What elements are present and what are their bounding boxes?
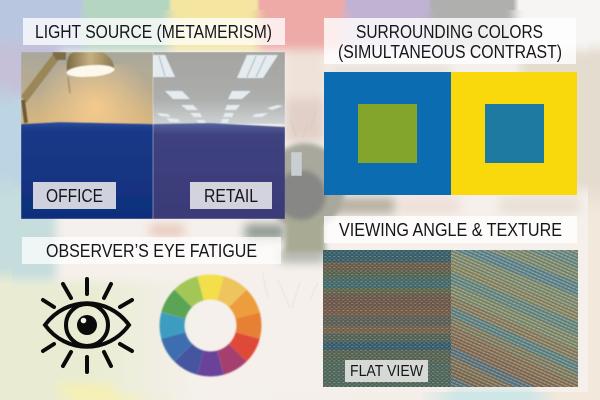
heading: surrounding colors: (SIMULTANEOUS CONTRAST) (338, 42, 562, 62)
heading: light source (23, 18, 285, 45)
label: flat view: FLAT VIEW (350, 363, 423, 380)
photo: retail lighting (153, 52, 285, 219)
heading: observer's eye fatigue (22, 237, 281, 264)
panel: viewing angle and texture (323, 214, 578, 400)
heading: surrounding colors (324, 18, 576, 64)
label: retail (190, 182, 272, 209)
label: office: OFFICE (46, 186, 103, 206)
photo: office lighting (21, 52, 153, 219)
fabric swatch: angled view (451, 250, 578, 387)
panel: observer's eye fatigue (22, 237, 281, 380)
heading: observer's eye fatigue: OBSERVER’S EYE FATIGUE (46, 241, 257, 261)
panel: light source (21, 18, 285, 219)
label: retail: RETAIL (204, 186, 258, 206)
contrast demo: teal on yellow (451, 72, 577, 195)
heading: viewing angle and texture: VIEWING ANGLE & TEXTURE (339, 220, 562, 240)
fabric swatch: flat view (323, 250, 451, 387)
heading: viewing angle and texture (324, 216, 577, 243)
label: office (33, 182, 116, 209)
panel: surrounding colors (324, 18, 577, 195)
contrast demo: green on blue (324, 72, 451, 195)
heading: light source: LIGHT SOURCE (METAMERISM) (35, 22, 272, 42)
chart: colour wheel (156, 271, 265, 380)
icon: eye (43, 279, 132, 372)
heading: surrounding colors: SURROUNDING COLORS (356, 22, 543, 42)
